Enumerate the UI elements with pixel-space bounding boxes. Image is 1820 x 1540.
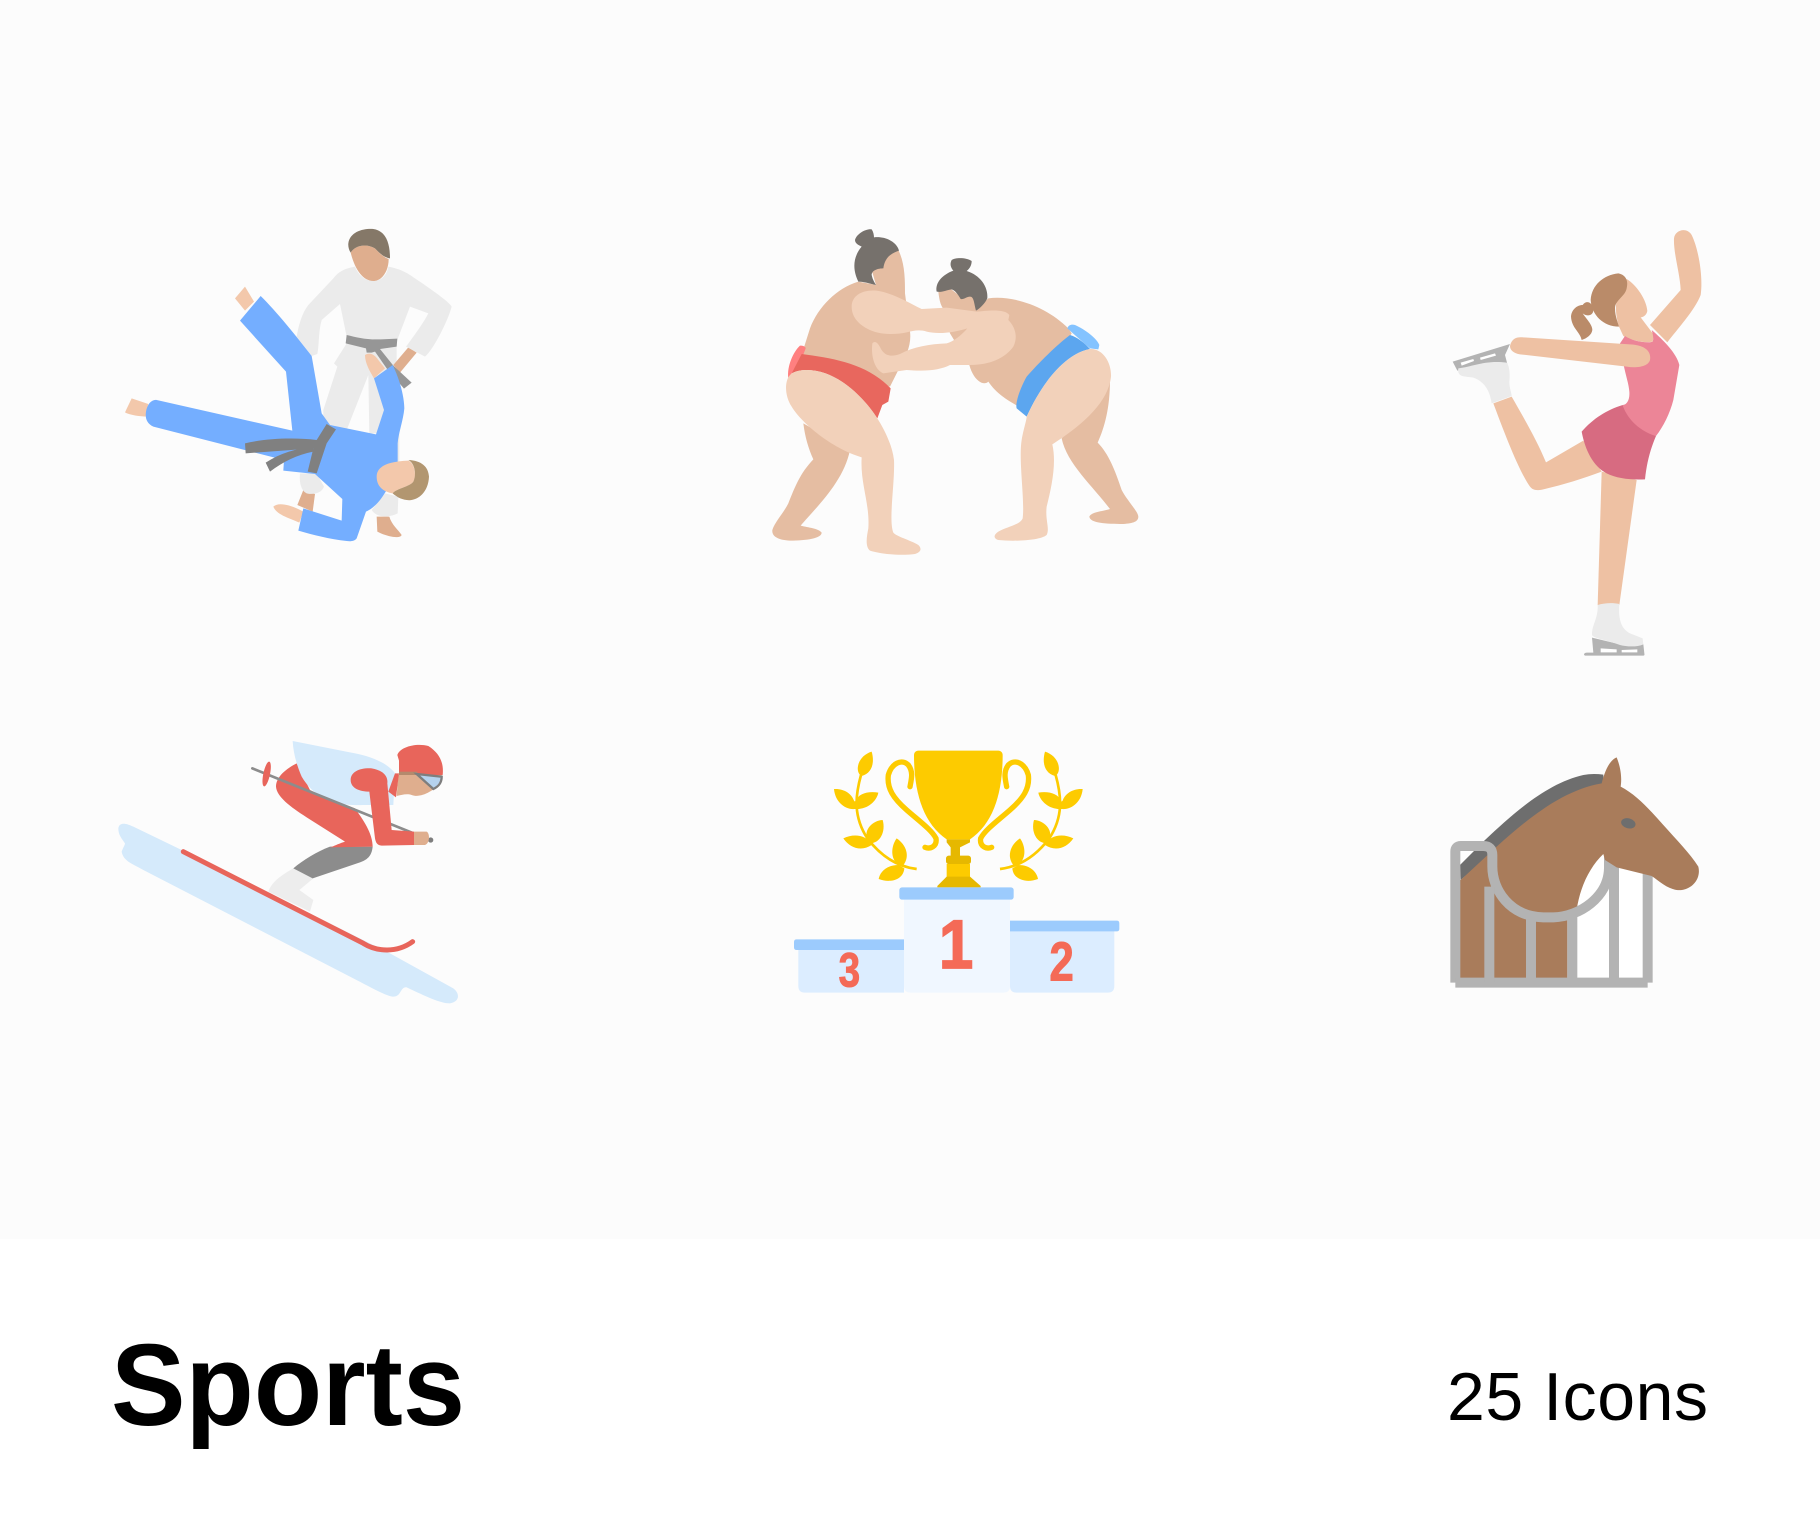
standing judoka in white gi — [297, 229, 452, 537]
icon: trophy on podium — [794, 751, 1119, 998]
hair — [1591, 273, 1627, 327]
stable fence — [1455, 846, 1648, 983]
leg — [293, 847, 373, 878]
title: Sports — [111, 1320, 465, 1450]
trophy — [888, 751, 1029, 887]
arm and hand — [351, 768, 429, 846]
dress top — [1620, 330, 1679, 436]
interlocked arms — [852, 290, 1016, 373]
icon: horse in stable — [1455, 757, 1699, 983]
podium third place: 3 — [839, 944, 860, 998]
reaching arm — [1510, 337, 1650, 367]
ponytail — [1571, 302, 1593, 340]
snow slope — [118, 824, 458, 1003]
dress skirt — [1582, 405, 1656, 479]
goggles — [417, 774, 442, 789]
icon: downhill skier — [118, 741, 458, 1003]
podium second place — [1010, 921, 1119, 993]
podium second place: 2 — [1049, 931, 1074, 992]
standing leg — [1598, 472, 1637, 605]
podium first place: 1 — [939, 906, 973, 983]
left laurel — [834, 752, 917, 881]
standing skate — [1584, 603, 1644, 656]
thrown judoka in blue gi — [125, 287, 429, 541]
cape — [293, 741, 395, 805]
boot — [268, 868, 313, 912]
podium first place — [899, 887, 1014, 993]
right sumo wrestler — [936, 258, 1138, 541]
icon count label: 25 Icons — [1447, 1359, 1708, 1435]
mane — [1460, 774, 1603, 880]
collar — [388, 773, 399, 797]
podium third place — [794, 939, 904, 998]
icon: figure skater — [1453, 230, 1701, 656]
icon: judo throw — [125, 229, 452, 541]
left sumo wrestler — [772, 229, 921, 555]
footer panel — [111, 1320, 1708, 1450]
raised arm — [1650, 230, 1701, 342]
face — [397, 775, 442, 796]
stable rear bars — [1609, 852, 1648, 983]
stall interior — [1460, 850, 1643, 978]
ski — [183, 852, 413, 950]
raised skate — [1453, 344, 1512, 403]
right laurel — [1000, 752, 1083, 881]
raised leg — [1493, 397, 1602, 490]
helmet — [397, 745, 443, 775]
face and neck — [1616, 279, 1654, 342]
body — [276, 763, 373, 847]
ski pole — [252, 761, 433, 843]
horse — [1460, 757, 1699, 978]
icon: sumo wrestlers — [772, 229, 1138, 555]
